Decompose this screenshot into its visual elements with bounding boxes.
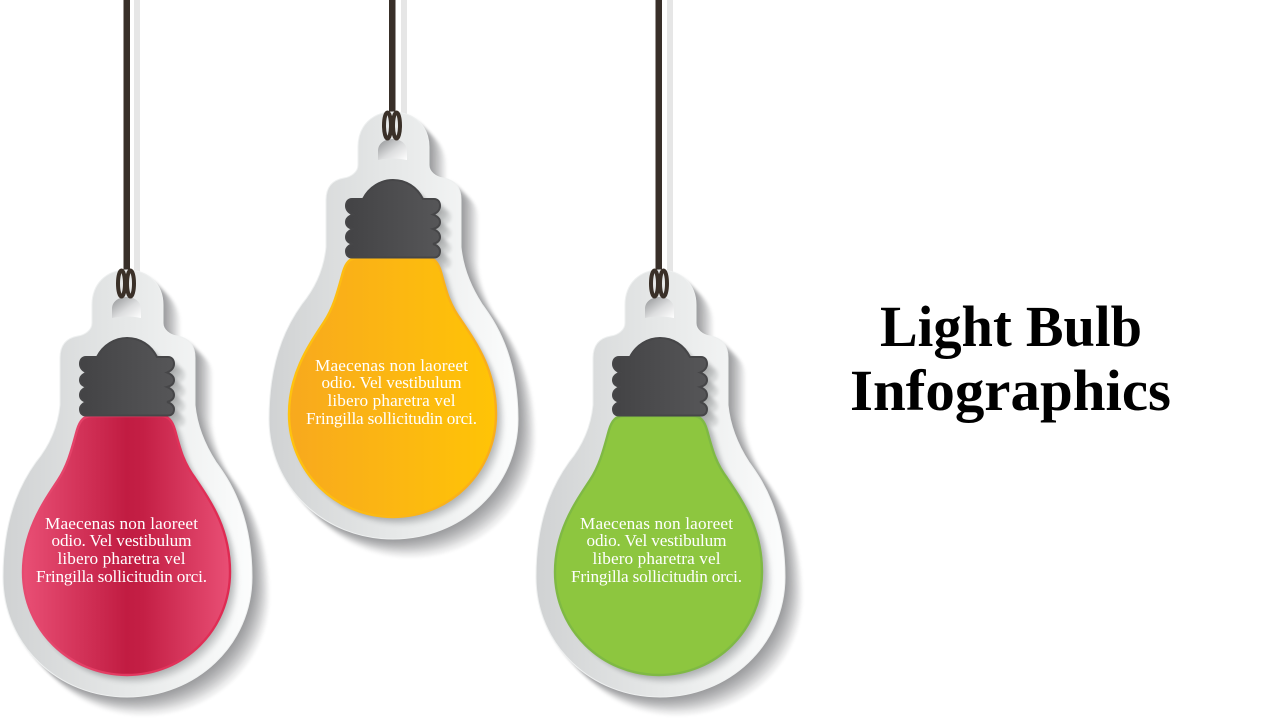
green bulb text: odio. Vel vestibulum	[586, 531, 727, 550]
light bulb: green	[536, 270, 802, 715]
cord: red bulb	[124, 0, 140, 284]
title: Infographics	[850, 358, 1171, 423]
title	[850, 294, 1171, 423]
green bulb text: Fringilla sollicitudin orci.	[571, 567, 742, 586]
red bulb text: odio. Vel vestibulum	[52, 531, 192, 550]
yellow bulb text: odio. Vel vestibulum	[322, 373, 462, 392]
green bulb text: Maecenas non laoreet	[580, 514, 733, 533]
yellow bulb glass	[289, 258, 496, 517]
green bulb text	[571, 514, 742, 586]
cord: green bulb	[656, 0, 673, 284]
light bulb: red	[3, 270, 269, 715]
red bulb hanging rings	[118, 270, 134, 296]
red bulb glass	[23, 416, 230, 675]
green bulb text: libero pharetra vel	[592, 549, 721, 568]
yellow bulb screw base	[346, 180, 440, 258]
yellow bulb hanging rings	[384, 112, 400, 138]
green bulb hanging rings	[651, 270, 667, 296]
title: Light Bulb	[880, 294, 1142, 359]
red bulb text	[36, 514, 207, 586]
light bulb: yellow	[269, 112, 535, 557]
red bulb text: Fringilla sollicitudin orci.	[36, 567, 207, 586]
cord: yellow bulb	[389, 0, 407, 126]
yellow bulb text	[306, 356, 477, 428]
green bulb screw base	[613, 338, 707, 416]
red bulb text: libero pharetra vel	[58, 549, 186, 568]
green bulb glass	[555, 416, 762, 675]
red bulb screw base	[80, 338, 174, 416]
yellow bulb text: Maecenas non laoreet	[315, 356, 468, 375]
red bulb text: Maecenas non laoreet	[45, 514, 198, 533]
yellow bulb text: libero pharetra vel	[328, 391, 456, 410]
yellow bulb text: Fringilla sollicitudin orci.	[306, 409, 477, 428]
